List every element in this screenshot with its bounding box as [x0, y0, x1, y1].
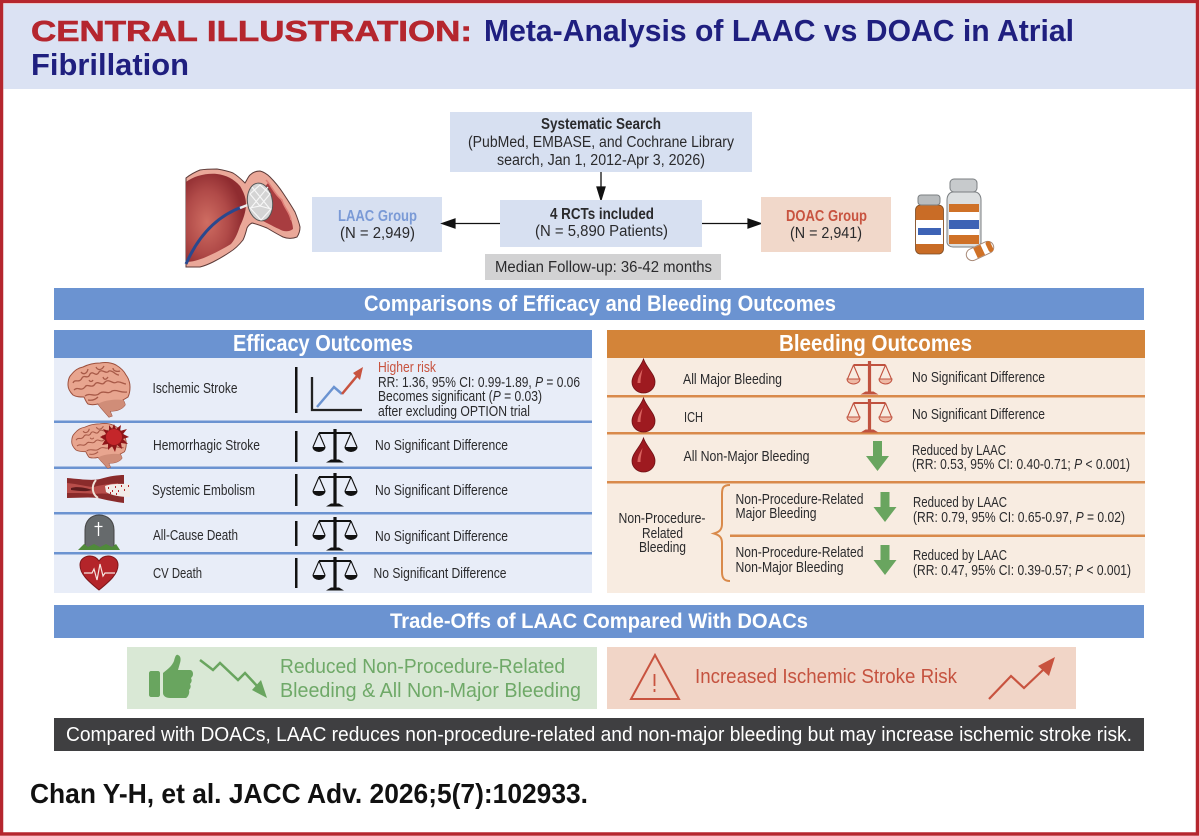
row: systemic embolism label: Systemic Embolism: [152, 483, 255, 499]
row: hemorrhagic stroke label: Hemorrhagic Stroke: [153, 438, 260, 454]
icon: balance scale: [312, 429, 358, 462]
arrow: RCTs to DOAC group: [702, 219, 761, 228]
icon: blood drop: [632, 438, 655, 472]
row: ischemic stroke result: after excluding OPTION trial: [378, 404, 530, 420]
icon: balance scale: [312, 557, 358, 590]
row: cv death label: CV Death: [153, 566, 202, 582]
panel header: bleeding: [607, 330, 1145, 358]
icon: hemorrhagic brain: [72, 423, 129, 468]
panel: risk: [607, 647, 1076, 709]
row: hemorrhagic stroke result: No Significant Difference: [375, 438, 508, 454]
row: ICH result: No Significant Difference: [912, 407, 1045, 423]
section bar: trade-offs: [54, 605, 1144, 638]
panel: efficacy outcomes: [54, 330, 592, 593]
row: all non-major bleeding result: Reduced by LAAC: [912, 443, 1006, 459]
box: LAAC group: (N = 2,949): [340, 225, 415, 242]
row: non-procedure-related non-major bleeding result: Reduced by LAAC: [913, 548, 1007, 564]
row: all non-major bleeding result: (RR: 0.53, 95% CI: 0.40-0.71; P < 0.001): [912, 457, 1130, 473]
icon: red balance scale: [847, 399, 892, 432]
icon: heart with ECG: [80, 556, 118, 590]
title: main heading: Fibrillation: [31, 47, 189, 82]
box: RCTs included: [500, 200, 702, 247]
icon: red balance scale: [847, 361, 892, 394]
box: systematic search: (PubMed, EMBASE, and Cochrane Library: [468, 134, 734, 151]
section bar: trade-offs: Trade-Offs of LAAC Compared With DOACs: [390, 609, 808, 633]
row: cv death result: No Significant Difference: [374, 566, 506, 582]
row: non-procedure-related non-major bleeding result: (RR: 0.47, 95% CI: 0.39-0.57; P < 0.001): [913, 563, 1131, 579]
row: ischemic stroke result: RR: 1.36, 95% CI: 0.99-1.89, P = 0.06: [378, 375, 580, 391]
row: all-cause death label: All-Cause Death: [153, 528, 238, 544]
icon: brain: [68, 363, 130, 417]
row: non-procedure-related major bleeding result: Reduced by LAAC: [913, 495, 1007, 511]
row: ICH label: ICH: [684, 410, 703, 426]
box: systematic search: Systematic Search: [541, 116, 661, 133]
label: non-procedure-related bleeding: Bleeding: [639, 540, 686, 556]
icon: green down arrow: [874, 492, 896, 522]
panel header: bleeding: Bleeding Outcomes: [779, 330, 972, 356]
box: DOAC group: (N = 2,941): [790, 225, 862, 242]
row: all-cause death result: No Significant Difference: [375, 529, 508, 545]
label: median follow-up: [485, 254, 721, 280]
panel header: efficacy: Efficacy Outcomes: [233, 330, 413, 356]
citation: Chan Y-H, et al. JACC Adv. 2026;5(7):102933.: [30, 778, 588, 809]
box: LAAC group: LAAC Group: [338, 208, 417, 225]
row: systemic embolism result: No Significant Difference: [375, 483, 508, 499]
text: reduced bleeding: [280, 656, 581, 702]
occluder device: [245, 181, 275, 223]
row: all major bleeding label: All Major Bleeding: [683, 372, 782, 388]
row: all non-major bleeding result: [912, 443, 1130, 473]
label: non-procedure-related bleeding: [618, 511, 706, 556]
text: increased ischemic stroke risk: Increased Ischemic Stroke Risk: [695, 666, 958, 688]
row: non-procedure-related non-major bleeding label: Non-Procedure-Related: [736, 545, 864, 561]
illustration: LAAC device in left atrial appendage: [186, 169, 300, 267]
row: ischemic stroke result: Higher risk: [378, 360, 437, 376]
panel: bleeding outcomes: [607, 330, 1145, 593]
icon: medication bottles: [916, 179, 996, 263]
row: non-procedure-related major bleeding label: [736, 492, 864, 522]
title: main heading: Meta-Analysis of LAAC vs DOAC in Atrial: [484, 13, 1074, 48]
row: all major bleeding result: No Significant Difference: [912, 370, 1045, 386]
arrow: RCTs to LAAC group: [442, 219, 500, 228]
box: systematic search: search, Jan 1, 2012-Apr 3, 2026): [497, 152, 705, 169]
title: central illustration label: CENTRAL ILLUSTRATION:: [31, 16, 472, 48]
text: reduced bleeding: Bleeding & All Non-Major Bleeding: [280, 680, 581, 702]
icon: rising risk chart: [312, 367, 363, 410]
text: reduced bleeding: Reduced Non-Procedure-Related: [280, 656, 565, 678]
box: DOAC group: DOAC Group: [786, 208, 867, 225]
icon: blood drop: [632, 359, 655, 393]
icon: tombstone: [78, 515, 120, 550]
conclusion bar: Compared with DOACs, LAAC reduces non-procedure-related and non-major bleeding but may increase ischemic stroke risk.: [66, 723, 1132, 746]
box: DOAC group: [761, 197, 891, 252]
row: ischemic stroke result: Becomes significant (P = 0.03): [378, 389, 542, 405]
icon: thumbs up: [149, 655, 193, 698]
box: RCTs included: (N = 5,890 Patients): [535, 223, 668, 240]
arrow: search to RCTs: [597, 172, 605, 200]
row: non-procedure-related major bleeding result: (RR: 0.79, 95% CI: 0.65-0.97, P = 0.02): [913, 510, 1125, 526]
icon: artery with embolism: [67, 475, 130, 503]
icon: blood drop: [632, 398, 655, 432]
row: non-procedure-related non-major bleeding label: Non-Major Bleeding: [736, 560, 844, 576]
brace: [714, 485, 730, 581]
section bar: comparisons: Comparisons of Efficacy and Bleeding Outcomes: [364, 291, 836, 316]
icon: green down arrow: [866, 441, 889, 471]
row: ischemic stroke label: Ischemic Stroke: [152, 381, 238, 397]
section bar: comparisons: [54, 288, 1144, 320]
title banner: [4, 4, 1196, 89]
icon: falling zigzag arrow: [200, 660, 267, 698]
label: non-procedure-related bleeding: Non-Procedure-: [618, 511, 706, 527]
icon: warning triangle: [631, 655, 679, 699]
box: LAAC group: [312, 197, 442, 252]
icon: green down arrow: [874, 545, 896, 575]
label: median follow-up: Median Follow-up: 36-42 months: [495, 259, 712, 276]
row: all non-major bleeding label: All Non-Major Bleeding: [684, 449, 810, 465]
row: non-procedure-related non-major bleeding label: [736, 545, 864, 576]
catheter: [186, 207, 242, 264]
icon: balance scale: [312, 473, 358, 506]
panel header: efficacy: [54, 330, 592, 358]
row: ischemic stroke result: [378, 360, 580, 420]
row: non-procedure-related major bleeding label: Non-Procedure-Related: [736, 492, 864, 508]
panel: benefit: [127, 647, 597, 709]
row: non-procedure-related major bleeding label: Major Bleeding: [736, 506, 816, 522]
icon: balance scale: [312, 517, 358, 550]
icon: rising zigzag arrow: [989, 657, 1055, 699]
row: non-procedure-related non-major bleeding result: [913, 548, 1131, 579]
label: non-procedure-related bleeding: Related: [642, 526, 683, 542]
box: RCTs included: 4 RCTs included: [550, 206, 654, 223]
conclusion bar: [54, 718, 1144, 751]
row: non-procedure-related major bleeding result: [913, 495, 1125, 526]
box: systematic search: [450, 112, 752, 172]
